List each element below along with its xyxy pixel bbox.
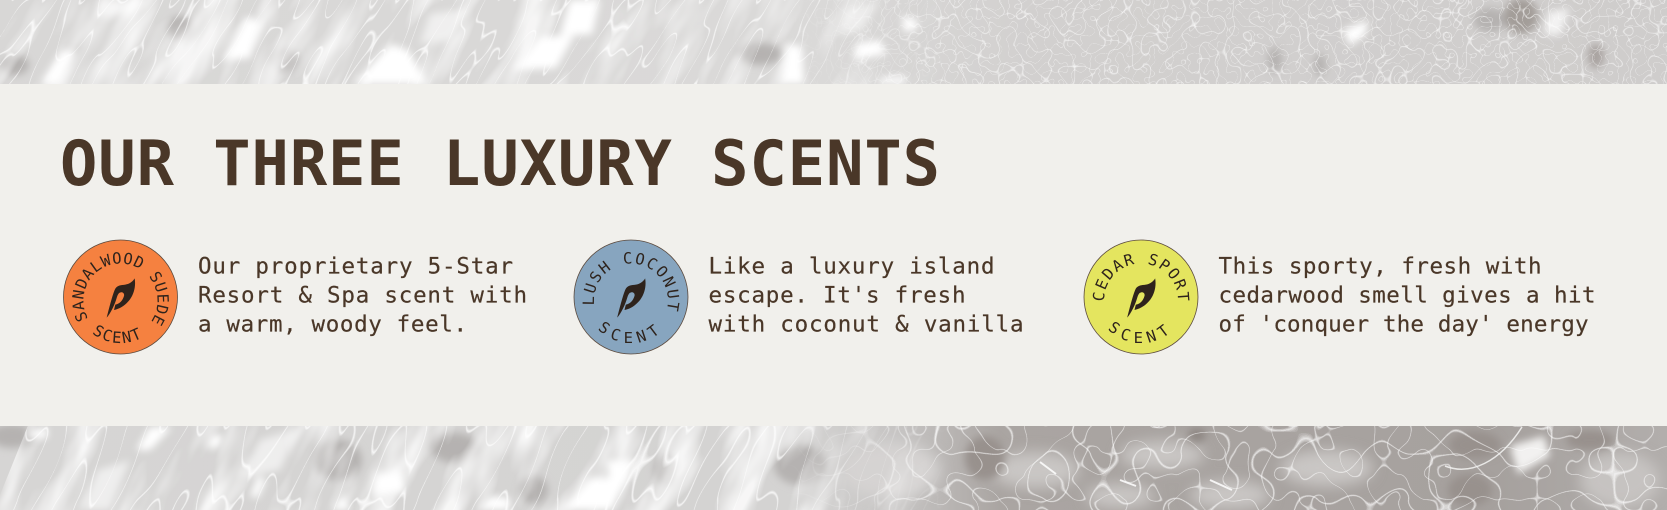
description: lush coconut bbox=[708, 254, 1024, 337]
badge: cedar sport scent bbox=[1084, 240, 1198, 354]
description: lush coconut: escape. It's fresh bbox=[708, 283, 966, 309]
badge: cedar sport scent: CEDAR SPORT bbox=[1092, 254, 1190, 300]
description: cedar sport: This sporty, fresh with bbox=[1218, 254, 1542, 280]
badge: lush coconut scent: LUSH COCONUT bbox=[582, 252, 680, 312]
card: sandalwood suede bbox=[63, 240, 527, 354]
panel: cream content band bbox=[0, 84, 1667, 426]
description: sandalwood suede: Resort & Spa scent with bbox=[198, 283, 527, 309]
badge: sandalwood suede scent: SCENT bbox=[93, 325, 139, 344]
description: sandalwood suede bbox=[198, 254, 527, 337]
badge: sandalwood suede scent: SANDALWOOD SUEDE bbox=[72, 252, 169, 326]
badge: sandalwood suede scent bbox=[63, 240, 178, 354]
title: OUR THREE LUXURY SCENTS bbox=[60, 127, 940, 200]
description: lush coconut: Like a luxury island bbox=[708, 254, 994, 280]
card: lush coconut bbox=[574, 240, 1024, 354]
badge: lush coconut scent bbox=[574, 240, 688, 354]
description: sandalwood suede: a warm, woody feel. bbox=[198, 311, 467, 337]
description: lush coconut: with coconut & vanilla bbox=[708, 311, 1024, 337]
badge: cedar sport scent: SCENT bbox=[1108, 322, 1167, 343]
description: sandalwood suede: Our proprietary 5-Star bbox=[198, 254, 513, 280]
description: cedar sport: cedarwood smell gives a hit bbox=[1218, 283, 1596, 309]
card: cedar sport bbox=[1084, 240, 1596, 354]
description: cedar sport: of 'conquer the day' energy bbox=[1218, 311, 1588, 337]
badge: lush coconut scent: SCENT bbox=[598, 322, 657, 343]
description: cedar sport bbox=[1218, 254, 1596, 337]
